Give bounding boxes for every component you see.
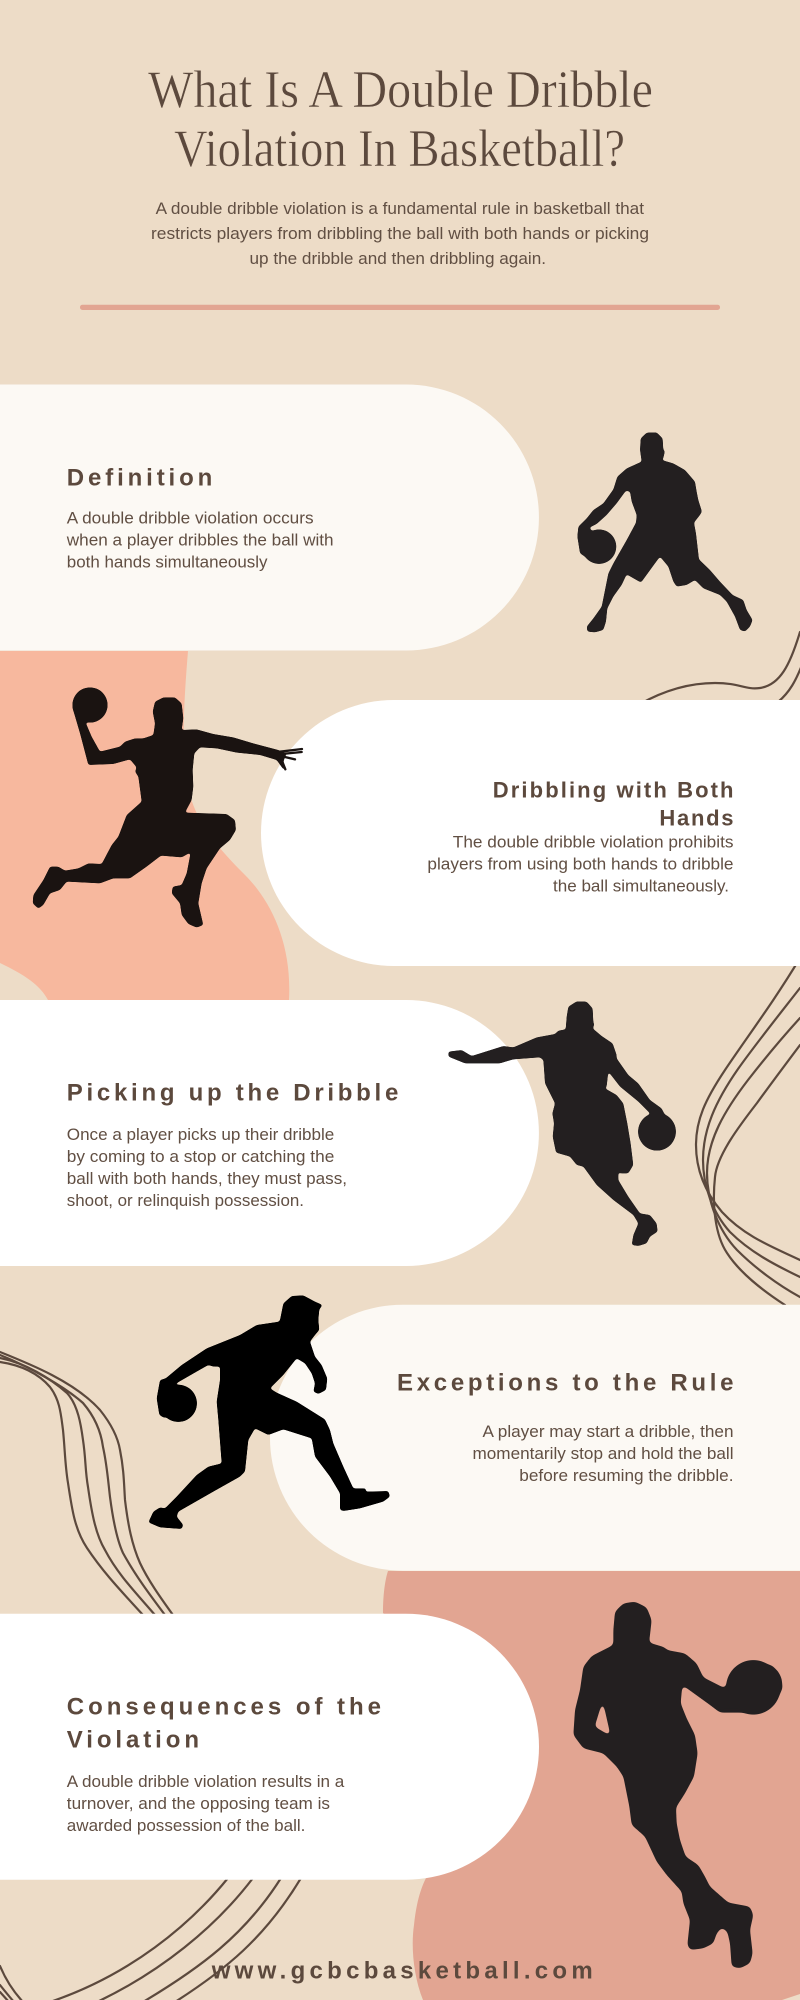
curved lines: upper right — [640, 632, 800, 1305]
heading: dribbling with both hands — [493, 778, 734, 831]
intro text: A double dribble violation is a fundamental rule in basketball that — [156, 200, 644, 218]
heading: consequences of the violation — [67, 1694, 381, 1754]
text: consequences of the violation: A double dribble violation results in a — [67, 1773, 345, 1791]
heading: consequences of the violation: Violation — [67, 1727, 199, 1754]
text: dribbling with both hands — [427, 833, 734, 895]
curved lines: bottom — [0, 1878, 301, 2000]
panel: definition — [0, 384, 539, 650]
icon: player silhouette running with ball — [148, 1295, 390, 1529]
text: exceptions to the rule: A player may start a dribble, then — [482, 1423, 734, 1441]
text: dribbling with both hands: the ball simultaneously. — [553, 877, 729, 895]
heading: consequences of the violation: Consequences of the — [67, 1694, 381, 1721]
text: picking up the dribble: Once a player picks up their dribble — [67, 1126, 334, 1144]
icon: player silhouette holding ball — [573, 1602, 783, 1968]
text: consequences of the violation — [67, 1773, 345, 1835]
text: consequences of the violation: awarded possession of the ball. — [67, 1817, 305, 1835]
panel: dribbling with both hands — [261, 700, 800, 966]
text: definition: A double dribble violation occurs — [67, 510, 314, 528]
text: picking up the dribble — [67, 1126, 347, 1210]
divider — [80, 305, 720, 310]
panel: exceptions to the rule — [270, 1305, 800, 1571]
heading: dribbling with both hands: Dribbling with Both — [493, 778, 734, 803]
heading: definition: Definition — [67, 464, 212, 491]
intro text: restricts players from dribbling the ball with both hands or picking — [151, 225, 649, 243]
title: What Is A Double Dribble — [148, 61, 653, 119]
icon: player silhouette dribbling low — [577, 432, 753, 632]
text: picking up the dribble: shoot, or relinquish possession. — [67, 1192, 304, 1210]
text: definition: when a player dribbles the ball with — [66, 532, 334, 550]
heading: picking up the dribble: Picking up the Dribble — [67, 1080, 398, 1107]
text: picking up the dribble: ball with both hands, they must pass, — [67, 1170, 347, 1188]
title — [148, 61, 653, 178]
icon: player silhouette jumping with ball — [33, 687, 302, 928]
header — [80, 61, 720, 310]
text: picking up the dribble: by coming to a stop or catching the — [67, 1148, 334, 1166]
heading: dribbling with both hands: Hands — [659, 806, 734, 831]
text: exceptions to the rule — [472, 1423, 734, 1485]
text: dribbling with both hands: players from using both hands to dribble — [427, 855, 734, 873]
text: exceptions to the rule: momentarily stop and hold the ball — [472, 1445, 734, 1463]
text: dribbling with both hands: The double dribble violation prohibits — [453, 833, 734, 851]
intro text — [151, 200, 649, 268]
text: consequences of the violation: turnover, and the opposing team is — [67, 1795, 330, 1813]
curved lines: left — [0, 1352, 173, 1615]
salmon blob — [383, 1571, 800, 2000]
panel: picking up the dribble — [0, 1000, 539, 1266]
text: exceptions to the rule: before resuming the dribble. — [519, 1467, 734, 1485]
footer url: www.gcbcbasketball.com — [211, 1957, 593, 1984]
icon: player silhouette driving with ball — [448, 1001, 676, 1246]
intro text: up the dribble and then dribbling again. — [250, 250, 546, 268]
text: definition: both hands simultaneously — [67, 554, 268, 572]
peach blob — [0, 651, 289, 1000]
text: definition — [66, 510, 334, 572]
title: Violation In Basketball? — [174, 120, 625, 178]
panel: consequences of the violation — [0, 1614, 539, 1880]
heading: exceptions to the rule: Exceptions to the Rule — [397, 1370, 734, 1397]
